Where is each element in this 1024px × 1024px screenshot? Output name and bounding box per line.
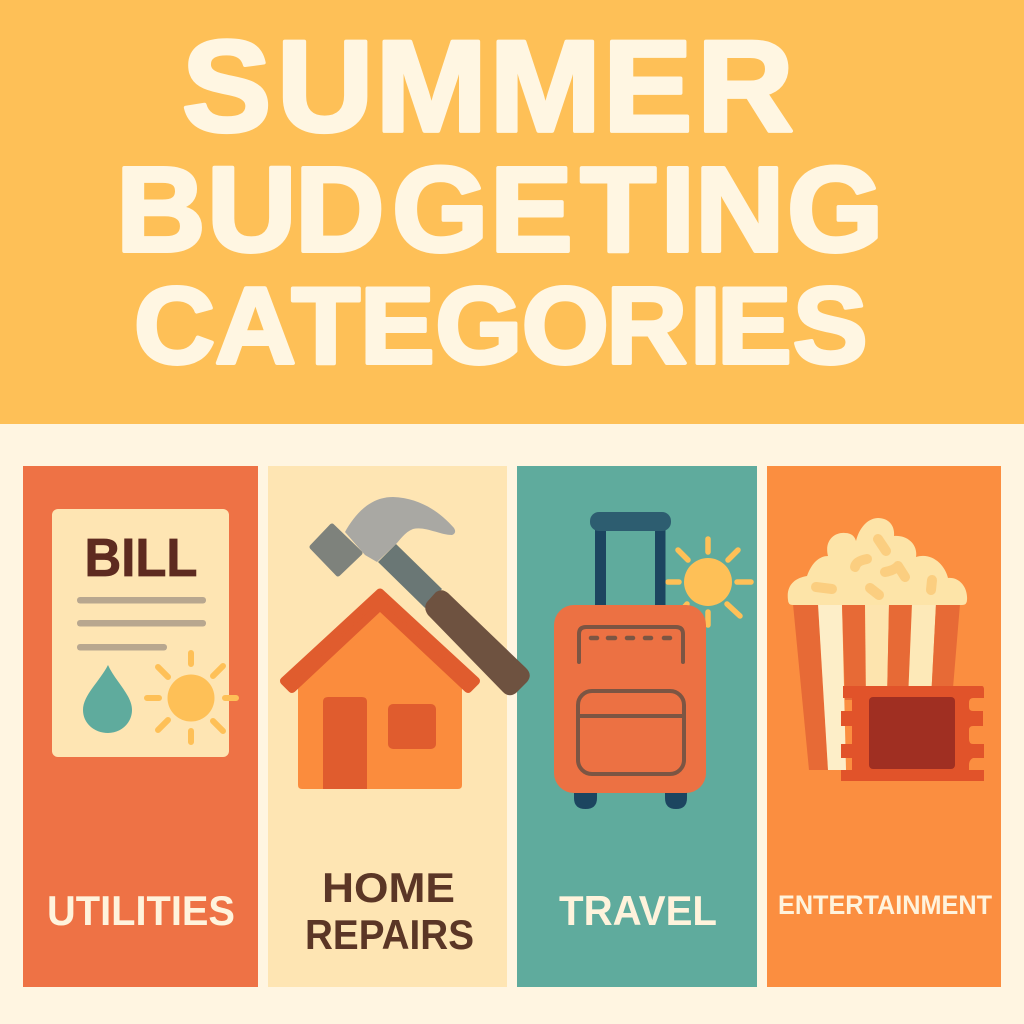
- icon: house: [284, 592, 476, 789]
- title: SUMMER: [182, 14, 794, 159]
- icon: popcorn: [788, 518, 967, 770]
- panel: entertainment: [767, 466, 1001, 987]
- label: utilities: UTILITIES: [47, 887, 235, 934]
- header band: [0, 0, 1024, 424]
- icon: hammer: [312, 497, 530, 695]
- title: BUDGETING: [116, 142, 883, 277]
- label: home repairs: REPAIRS: [305, 911, 474, 958]
- icon: water drop: [83, 665, 132, 733]
- icon: sun: [668, 539, 751, 625]
- label: entertainment: ENTERTAINMENT: [778, 890, 992, 920]
- icon: sun: [147, 653, 236, 742]
- label: home repairs: [305, 864, 474, 958]
- label: home repairs: HOME: [322, 864, 455, 911]
- icon: film ticket: [841, 686, 984, 781]
- panel: home repairs: [268, 466, 530, 987]
- title: [116, 14, 883, 386]
- icon: bill document: BILL: [84, 528, 198, 588]
- icon: bill document: [52, 509, 236, 757]
- label: travel: TRAVEL: [559, 887, 717, 934]
- title: CATEGORIES: [134, 265, 868, 386]
- panel: utilities: [23, 466, 258, 987]
- icon: suitcase: [554, 512, 706, 809]
- panel: travel: [517, 466, 757, 987]
